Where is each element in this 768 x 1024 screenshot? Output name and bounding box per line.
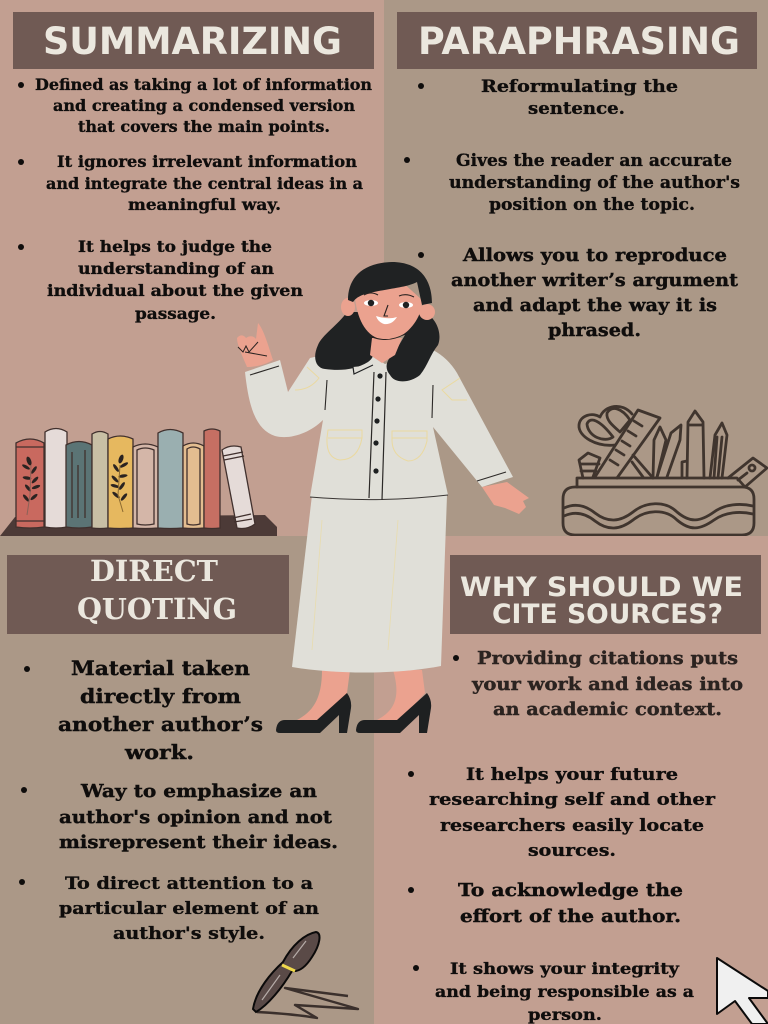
text: direct quoting point 3: author's style. xyxy=(113,924,265,944)
text: paraphrasing point 3: and adapt the way it is xyxy=(473,295,717,316)
text: summarizing point 1: that covers the main points. xyxy=(78,117,330,136)
front hair xyxy=(348,262,432,305)
text: direct quoting point 1: work. xyxy=(124,740,194,764)
text: citing point 3 xyxy=(408,880,683,927)
text: summarizing point 1: and creating a condensed version xyxy=(53,96,355,115)
text: direct quoting point 1: directly from xyxy=(80,684,241,708)
text: summarizing point 3: passage. xyxy=(135,304,216,323)
text: direct quoting point 3: particular element of an xyxy=(59,899,319,919)
text: direct quoting point 2: author's opinion and not xyxy=(59,807,333,828)
heading: summarizing xyxy=(13,12,374,69)
text: citing point 4: and being responsible as a xyxy=(435,982,694,1001)
text: citing point 2: researching self and other xyxy=(429,790,716,810)
text: citing point 2: It helps your future xyxy=(466,765,678,785)
text: citing point 1: an academic context. xyxy=(493,699,722,720)
icon: leaf on red book xyxy=(21,456,41,515)
text: paraphrasing point 2: Gives the reader an accurate xyxy=(456,151,732,171)
heading: why should we cite sources: WHY SHOULD WE xyxy=(460,572,743,603)
text: citing point 3: To acknowledge the xyxy=(458,880,683,901)
text: direct quoting point 2: misrepresent their ideas. xyxy=(59,832,338,853)
icon: pen and squiggle xyxy=(253,932,358,1018)
heading: why should we cite sources xyxy=(450,555,761,634)
eyes and smile xyxy=(364,293,414,324)
panel: summarizing xyxy=(0,0,384,536)
text: citing point 2: sources. xyxy=(528,841,616,861)
text: paraphrasing point 1: sentence. xyxy=(528,99,625,119)
heading: direct quoting xyxy=(7,554,289,634)
panel: paraphrasing xyxy=(384,0,768,536)
heading: direct quoting: QUOTING xyxy=(77,592,237,626)
text: citing point 4: It shows your integrity xyxy=(450,959,680,978)
heading: direct quoting: DIRECT xyxy=(90,554,218,588)
heading: paraphrasing: PARAPHRASING xyxy=(418,20,740,63)
text: paraphrasing point 3: Allows you to reproduce xyxy=(462,245,727,266)
lowered hand xyxy=(482,482,529,514)
icon: leaf on yellow book xyxy=(110,454,129,512)
illustration: bookshelf xyxy=(0,428,277,536)
text: paraphrasing point 3: phrased. xyxy=(548,320,641,341)
text: direct quoting point 2 xyxy=(21,781,338,853)
text: summarizing point 2: It ignores irrelevant information xyxy=(57,152,357,171)
illustration: teacher figure xyxy=(237,262,529,733)
text: citing point 4 xyxy=(413,959,694,1024)
heading: why should we cite sources: CITE SOURCES? xyxy=(492,599,723,630)
text: summarizing point 3: It helps to judge the xyxy=(78,237,272,256)
text: paraphrasing point 1: Reformulating the xyxy=(481,77,678,97)
jacket xyxy=(245,350,513,500)
text: paraphrasing point 2: position on the topic. xyxy=(489,195,695,215)
text: direct quoting point 2: Way to emphasize an xyxy=(80,781,317,802)
text: direct quoting point 1 xyxy=(24,656,263,764)
text: paraphrasing point 3 xyxy=(418,245,739,341)
text: direct quoting point 1: another author’s xyxy=(58,712,263,736)
raised hand xyxy=(237,323,273,367)
text: paraphrasing point 3: another writer’s argument xyxy=(451,270,739,291)
text: citing point 1: your work and ideas into xyxy=(471,674,743,695)
icon: cursor arrow xyxy=(717,958,768,1024)
text: summarizing point 2 xyxy=(18,152,363,214)
illustration: pencil case xyxy=(563,406,767,535)
text: citing point 4: person. xyxy=(528,1005,602,1024)
text: direct quoting point 1: Material taken xyxy=(71,656,250,680)
text: summarizing point 3: understanding of an xyxy=(78,259,274,278)
panel: direct quoting xyxy=(0,536,374,1024)
text: direct quoting point 3 xyxy=(19,874,319,944)
text: direct quoting point 3: To direct attention to a xyxy=(65,874,313,894)
text: paraphrasing point 2 xyxy=(404,151,740,215)
text: paraphrasing point 1 xyxy=(418,77,678,119)
text: citing point 1: Providing citations puts xyxy=(477,648,738,669)
text: summarizing point 1 xyxy=(18,75,372,136)
neck and collar xyxy=(353,338,402,374)
text: summarizing point 2: meaningful way. xyxy=(128,195,281,214)
text: summarizing point 1: Defined as taking a lot of information xyxy=(35,75,372,94)
text: citing point 2: researchers easily locate xyxy=(440,816,704,836)
text: summarizing point 2: and integrate the central ideas in a xyxy=(46,174,363,193)
skirt xyxy=(292,495,447,673)
text: citing point 3: effort of the author. xyxy=(460,906,681,927)
heading: paraphrasing xyxy=(397,12,757,69)
back hair xyxy=(315,312,439,381)
text: summarizing point 3 xyxy=(18,237,303,323)
panel: why should we cite sources xyxy=(374,536,768,1024)
shoes xyxy=(276,693,431,733)
text: paraphrasing point 2: understanding of the author's xyxy=(449,173,740,193)
face xyxy=(341,280,435,340)
text: citing point 1 xyxy=(453,648,743,720)
text: citing point 2 xyxy=(408,765,716,861)
legs xyxy=(297,670,425,720)
text: summarizing point 3: individual about the given xyxy=(47,281,303,300)
heading: summarizing: SUMMARIZING xyxy=(43,20,342,63)
